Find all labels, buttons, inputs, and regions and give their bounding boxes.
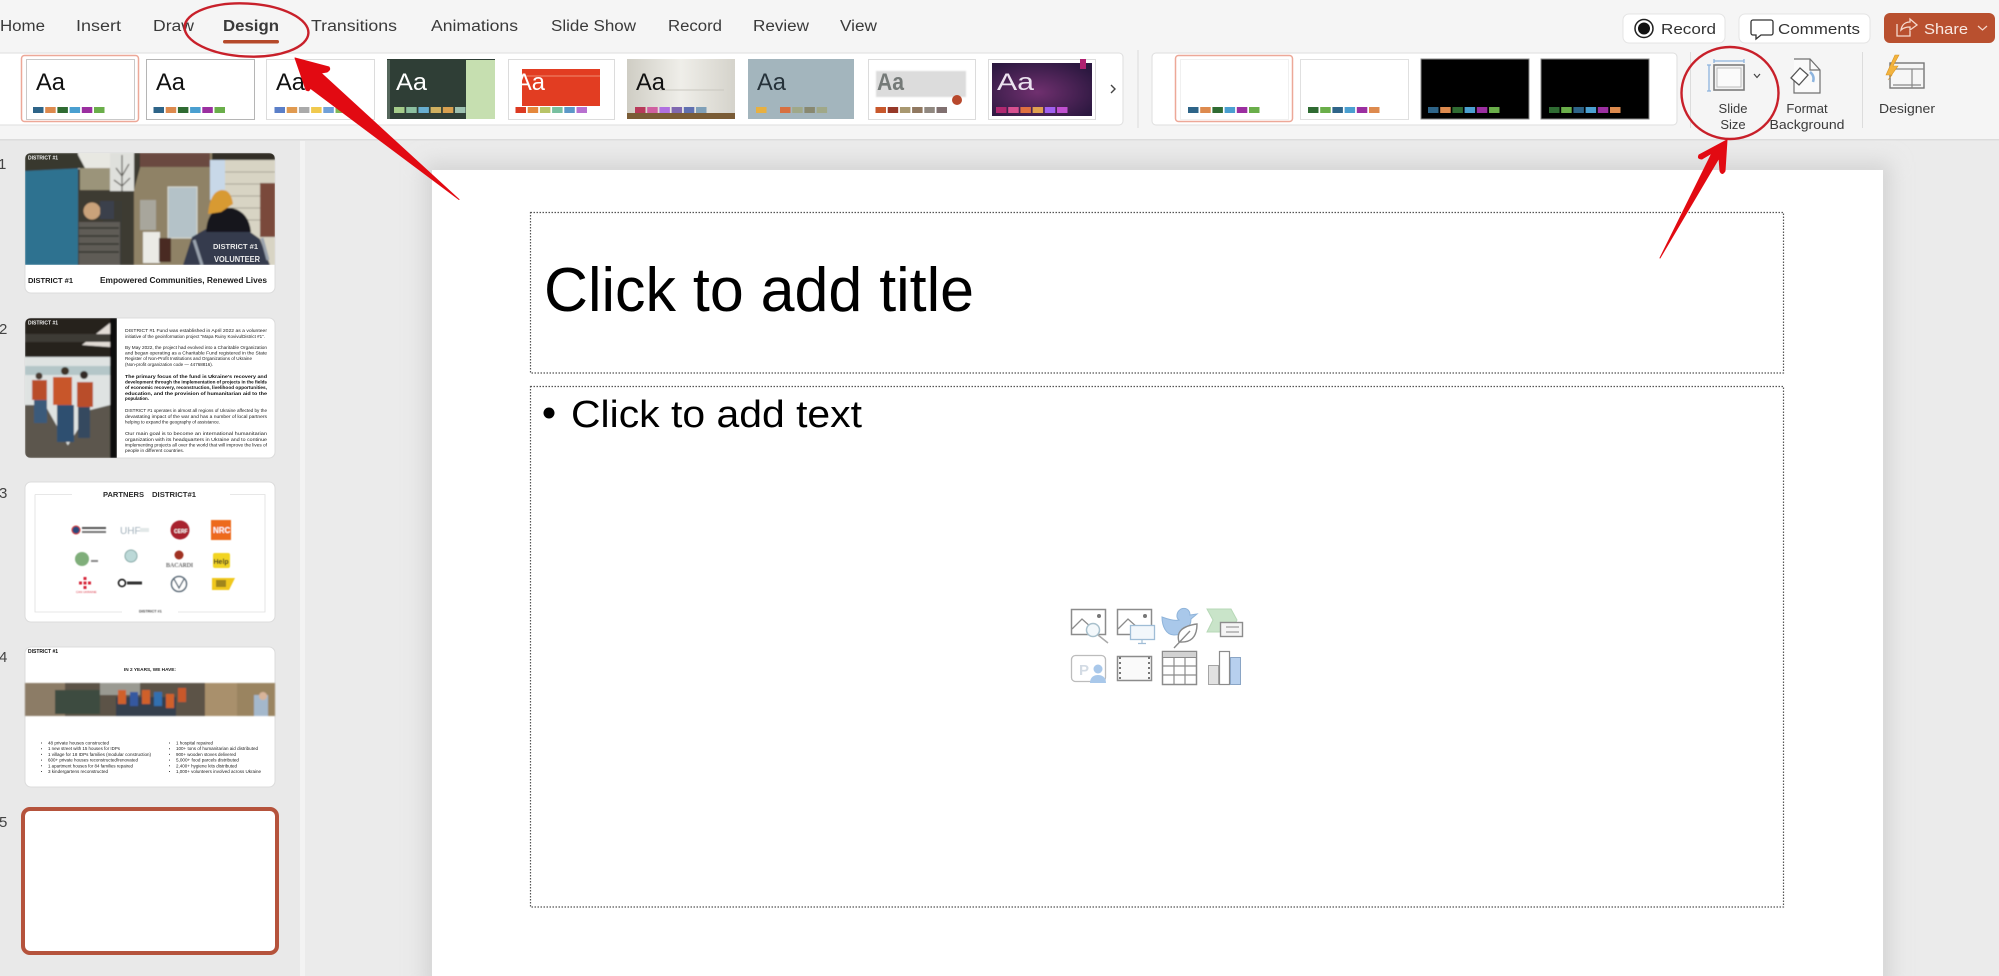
ribbon button: Format Background: Background (1770, 117, 1844, 132)
variant 4 (1541, 59, 1649, 119)
volunteer jacket print (214, 244, 260, 262)
panel: variants gallery (1152, 53, 1677, 125)
ribbon button: Format Background: Format (1786, 101, 1828, 116)
about text: By May 2022, the project had evolved into a Charitable Organization (125, 345, 268, 350)
about text: Our main goal is to become an international humanitarian (125, 431, 268, 436)
accomplishments list: 600+ private houses reconstructed/renovated (48, 758, 139, 763)
divider left of Designer (1862, 52, 1863, 128)
partner logos (72, 520, 235, 614)
tab bar: Slide Show (551, 18, 637, 35)
thumbnail: slide 3 (25, 482, 275, 622)
sidebar background (0, 140, 300, 976)
ribbon button: Designer (1879, 55, 1936, 116)
icon: stock images (1072, 610, 1108, 643)
about text: DISTRICT #1 Fund was established in April 2022 as a volunteer (125, 328, 268, 333)
theme thumbnail 7 (748, 59, 854, 119)
theme thumbnail 4: Aa (396, 69, 428, 96)
slide shadow (424, 162, 1891, 976)
title: partners (103, 492, 196, 499)
thumbnail: slide 2 (25, 318, 275, 458)
about text: and began operating as a Charitable Fund registered in the State (125, 350, 268, 356)
panel: slide thumbnails (0, 153, 277, 953)
thumbnail: slide 4 (25, 647, 275, 787)
theme thumbnail 5 (508, 60, 614, 120)
button: Comments: Comments (1778, 21, 1860, 38)
title placeholder (530, 212, 1784, 373)
partner logos: BACARDI (166, 563, 193, 569)
accomplishments list: 100+ tons of humanitarian aid distributed (176, 746, 259, 751)
thumbnail: slide 1 (25, 153, 275, 293)
variant 3 (1421, 59, 1529, 119)
sidebar divider (300, 141, 305, 976)
slide number labels (0, 156, 7, 831)
about text: (Non-profit organization code — 44768816). (125, 362, 213, 367)
tab bar: View (840, 18, 878, 35)
icon: pictures (1118, 610, 1154, 644)
volunteer jacket print: VOLUNTEER (214, 255, 260, 264)
about text: The primary focus of the fund is Ukraine's recovery and (125, 374, 267, 379)
partner logos: CAN UKRAINE (76, 590, 97, 594)
button: Comments (1739, 14, 1870, 43)
arrow: pointing to Slide Size (1660, 140, 1727, 258)
panel: theme gallery (0, 53, 1123, 125)
tab bar: Home (0, 18, 45, 35)
arrow: pointing to Design tab (295, 58, 459, 200)
about text: development through the implementation of projects in the fields (125, 380, 268, 384)
tab bar (0, 18, 878, 44)
about text: implementing projects all over the world that will improve the lives of (125, 442, 268, 448)
photo: workers in debris (25, 318, 117, 458)
theme thumbnail 8 (868, 60, 976, 120)
icon: video (1118, 656, 1152, 681)
theme thumbnail 3: Aa (276, 69, 306, 96)
tab bar: Record (668, 18, 722, 35)
theme thumbnail 2 (146, 60, 254, 120)
theme thumbnail 9 (988, 59, 1096, 120)
partner logos: DISTRICT #1 (139, 610, 162, 614)
theme thumbnail 3 (266, 60, 374, 120)
icon: presenter photo: P (1079, 662, 1089, 679)
about text (125, 328, 268, 453)
about text: helping to expand the geography of assistance. (125, 420, 220, 424)
icon: designer (1886, 55, 1924, 88)
ribbon button: Slide Size (1707, 59, 1760, 132)
icon: smartart (1207, 609, 1242, 636)
annotation: circle around Slide Size (1682, 47, 1778, 139)
ribbon button: Format Background (1770, 59, 1844, 132)
partner logos: UHF (120, 526, 141, 537)
ribbon button: Slide Size: Slide (1719, 101, 1747, 116)
accomplishments list: 5,000+ food parcels distributed (176, 758, 240, 763)
about text: education, and the provision of humanitarian aid to the (125, 391, 268, 396)
photo: volunteers in courtyard (25, 153, 275, 265)
tab bar: Animations (431, 18, 518, 35)
photo caption: logo: DISTRICT #1 (28, 156, 58, 162)
about text: population. (125, 396, 149, 401)
icon: slide size (1707, 59, 1760, 91)
tab bar: Draw (153, 18, 195, 35)
accomplishments list: 48 private houses constructed (48, 740, 110, 746)
theme thumbnail 1 (selected): Aa (36, 69, 66, 96)
heading: IN 2 YEARS, WE HAVE: (124, 667, 176, 673)
active tab: Design (223, 18, 279, 44)
footer text (28, 276, 268, 285)
accomplishments list: 900+ wooden stoves delivered (176, 752, 237, 757)
about text: of economic recovery, reconstruction, livelihood opportunities, (125, 385, 267, 390)
partner logos: CERF (174, 529, 188, 535)
tab bar: Transitions (311, 18, 397, 35)
variant 2 (1300, 60, 1408, 120)
ribbon button: Slide Size: Size (1720, 117, 1746, 132)
footer text: Empowered Communities, Renewed Lives (100, 276, 268, 285)
button: Record: Record (1661, 21, 1716, 38)
title: partners: DISTRICT#1 (152, 492, 196, 499)
panel: slide canvas (432, 170, 1883, 976)
photo logo: DISTRICT #1 (28, 320, 58, 326)
accomplishments list: 1,000+ volunteers involved across Ukraine (176, 769, 262, 774)
title: partners: PARTNERS (103, 492, 144, 499)
accomplishments list (41, 740, 262, 774)
about text: organization with its headquarters in Ukraine and to continue (125, 437, 268, 442)
theme thumbnail 6 (627, 59, 735, 119)
ribbon button: Designer: Designer (1879, 101, 1936, 116)
theme thumbnail 6: Aa (636, 69, 666, 96)
about text: people in different countries. (125, 448, 184, 453)
icon: format background (1791, 59, 1820, 93)
thumbnail: slide 5 (selected, blank) (23, 809, 277, 953)
tab bar: Review (753, 18, 810, 35)
volunteer jacket print: DISTRICT #1 (213, 244, 258, 251)
theme thumbnail 8: Aa (877, 69, 905, 96)
content placeholder: Click to add text (571, 394, 862, 436)
logo: DISTRICT #1 (28, 649, 58, 655)
accomplishments list: 3 kindergartens reconstructed (48, 769, 109, 774)
icon: table (1162, 652, 1197, 684)
theme thumbnail 5: Aa (516, 69, 546, 96)
partner logos: NRC (213, 526, 231, 535)
icon: icons (1162, 608, 1197, 648)
theme thumbnail 7: Aa (757, 69, 787, 96)
theme thumbnail 1 (selected) (22, 56, 138, 122)
icon: presenter photo (1072, 656, 1106, 683)
accomplishments list: 2,400+ hygiene kits distributed (176, 763, 238, 768)
content placeholder (530, 386, 1784, 907)
theme thumbnail 9: Aa (997, 69, 1035, 96)
accomplishments list: 1 hospital repaired (176, 740, 214, 746)
ribbon background (0, 0, 1999, 140)
partner logos: Help (214, 559, 229, 566)
active tab: Design: Design (223, 18, 279, 35)
footer text: DISTRICT #1 (28, 276, 73, 285)
theme thumbnail 2: Aa (156, 69, 186, 96)
tab bar: Insert (76, 18, 122, 35)
photo band (25, 683, 275, 716)
about text: devastating impact of the war and has a number of local partners (125, 414, 267, 419)
button: Share: Share (1924, 21, 1968, 38)
divider left of Slide Size (1690, 52, 1691, 128)
about text: Register of Non-Profit Institutions and Organizations of Ukraine (125, 356, 253, 361)
about text: initiative of the geoinformation project "Mapa Ruiny Kovivu/District #1". (125, 334, 265, 339)
accomplishments list: 1 apartment houses for 84 families repaired (48, 763, 134, 768)
accomplishments list: 1 new street with 15 houses for IDPs (48, 746, 120, 751)
gallery chevron (1111, 85, 1115, 93)
divider between galleries (1138, 50, 1139, 128)
variant 1 (selected) (1176, 56, 1292, 122)
button: Share (1884, 13, 1995, 43)
title placeholder: Click to add title (544, 256, 974, 325)
content type icons (1072, 608, 1242, 684)
about text: DISTRICT #1 operates in almost all regions of Ukraine affected by the (125, 408, 268, 413)
button: Record (1623, 14, 1725, 43)
annotation: circle around Design tab (183, 0, 310, 60)
theme thumbnail 4 (387, 59, 495, 119)
accomplishments list: 1 village for 18 IDPs families (modular construction) (48, 752, 152, 757)
icon: chart (1208, 652, 1240, 684)
